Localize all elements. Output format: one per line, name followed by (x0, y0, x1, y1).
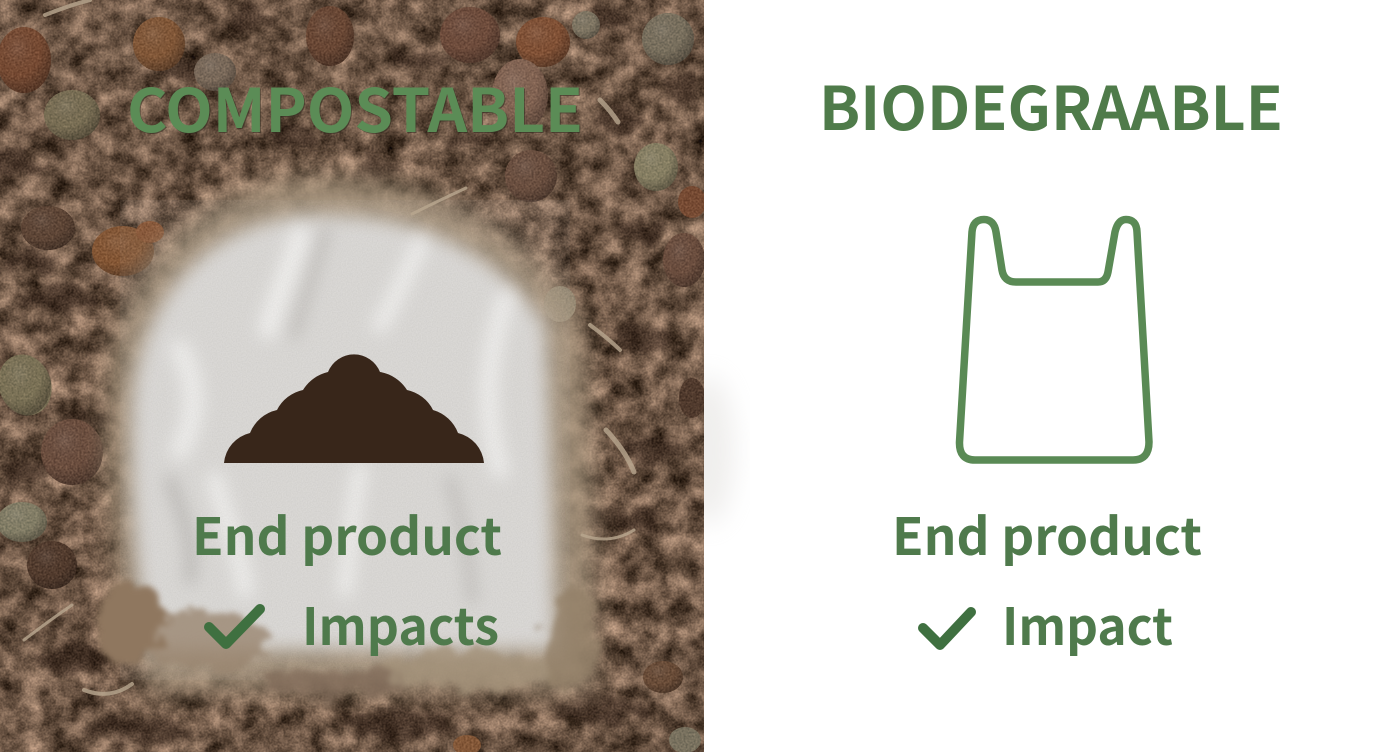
text: End product (biodegradable): End product (892, 496, 1202, 570)
text: Impacts: Impacts (302, 586, 499, 660)
soil dark crevices (0, 8, 698, 742)
title: COMPOSTABLE: COMPOSTABLE (127, 63, 583, 150)
icon: check mark (biodegradable) (923, 612, 971, 645)
title: COMPOSTABLE: COMPOSTABLE (128, 64, 584, 151)
icon: plastic bag (959, 220, 1149, 460)
stones (0, 6, 706, 752)
soil grain texture (0, 0, 704, 752)
text: Impact: Impact (1002, 586, 1173, 660)
icon: check mark (compostable) (209, 609, 260, 644)
panel: compostable soil background (0, 0, 706, 752)
white cloth (120, 200, 570, 680)
icon: compost pile (224, 354, 484, 463)
cloth fine texture (120, 200, 570, 680)
soil clumps over cloth bottom (96, 585, 598, 698)
text: End product (compostable): End product (192, 496, 502, 570)
twigs and debris (24, 0, 634, 694)
title: BIODEGRAABLE: BIODEGRAABLE (819, 61, 1283, 148)
sandy halo around cloth (108, 177, 594, 690)
